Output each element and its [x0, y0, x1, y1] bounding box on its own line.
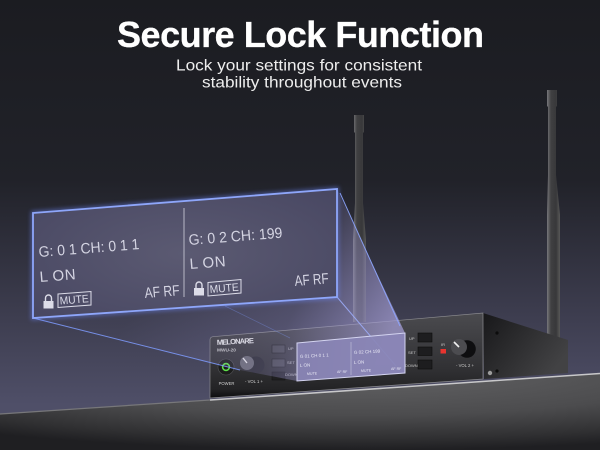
brand label: MELONARE — [217, 336, 254, 347]
device screen: G 01 CH 0 1 1 — [300, 352, 329, 359]
projection light beams — [33, 189, 405, 381]
left channel readout: AF RF — [144, 282, 180, 302]
table surface — [0, 373, 600, 450]
right buttons: SET — [408, 350, 416, 355]
IR indicator — [440, 342, 446, 354]
left buttons: DOWN — [285, 372, 298, 377]
brand label — [217, 336, 254, 354]
right channel readout: L ON — [189, 253, 226, 273]
projected display panel — [33, 189, 337, 318]
mute badge right: MUTE — [209, 282, 239, 296]
left channel readout — [38, 236, 180, 302]
device screen: AF RF — [391, 367, 402, 371]
device screen — [297, 333, 405, 381]
icon: lock right — [194, 282, 204, 296]
device screen: G 02 CH 199 — [354, 349, 381, 355]
device side — [483, 313, 568, 379]
left buttons: UP — [288, 346, 294, 351]
panel glow — [33, 189, 337, 318]
left channel readout: G: 0 1 CH: 0 1 1 — [38, 236, 140, 261]
volume 1 knob: - VOL 1 + — [245, 379, 263, 384]
icon: lock left — [44, 295, 54, 308]
subtitle: stability throughout events — [202, 74, 402, 92]
device screen: MUTE — [307, 371, 318, 376]
receiver unit — [210, 313, 568, 398]
panel body — [33, 189, 337, 318]
icon: power button — [218, 359, 234, 386]
right buttons: UP — [409, 336, 415, 341]
brand label: MWU-20 — [217, 348, 236, 354]
left buttons — [272, 345, 298, 380]
device screen: L ON — [354, 359, 364, 365]
right buttons: DOWN — [405, 363, 418, 368]
device screen: AF RF — [337, 370, 348, 374]
side screws — [488, 331, 499, 375]
right channel readout: AF RF — [294, 270, 329, 290]
left channel readout: L ON — [39, 266, 76, 286]
device screen: MUTE — [361, 368, 372, 373]
device screen: L ON — [300, 362, 310, 368]
left buttons: SET — [287, 360, 295, 365]
title: Secure Lock Function — [117, 14, 484, 55]
right buttons — [405, 333, 432, 369]
IR indicator: IR — [441, 342, 445, 347]
right channel readout: G: 0 2 CH: 199 — [188, 225, 283, 249]
antenna: left — [353, 115, 366, 322]
volume 2 knob — [451, 339, 476, 368]
subtitle: Lock your settings for consistent — [176, 58, 423, 74]
volume 1 knob — [240, 356, 264, 384]
icon: power button: POWER — [219, 381, 234, 386]
display divider — [183, 208, 185, 297]
volume 2 knob: - VOL 2 + — [456, 363, 474, 368]
antenna: right — [547, 90, 560, 338]
subtitle — [176, 58, 423, 92]
device front — [210, 313, 483, 398]
right channel readout — [188, 225, 329, 290]
mute badge left: MUTE — [59, 293, 89, 307]
